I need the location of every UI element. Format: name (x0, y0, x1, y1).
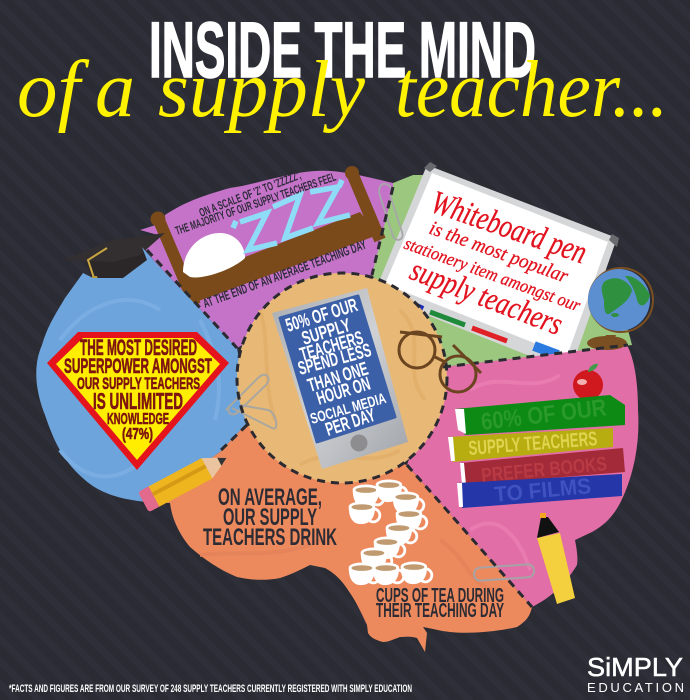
text: books vs films (468, 394, 608, 507)
text: whiteboard pen: stationery item amongst our (402, 233, 584, 316)
text: social media: TEACHERS (298, 328, 366, 366)
text: sleep scale intro: ON A SCALE OF 'Z' TO 'ZZZZZ', (197, 168, 303, 220)
subtitle (17, 46, 668, 134)
icon: left paperclips (226, 375, 276, 429)
icon: number two made of tea cups (349, 480, 432, 585)
logo: SiMPLY (587, 652, 683, 682)
subtitle: supply (158, 46, 365, 134)
text: superpower: (47%) (122, 426, 153, 443)
text: on average: TEACHERS DRINK (203, 524, 337, 551)
brain illustration (36, 162, 653, 652)
text: books vs films: 60% OF OUR (480, 394, 608, 436)
text: whiteboard pen: supply teachers (405, 251, 568, 342)
text: social media: HOUR ON (314, 374, 373, 410)
panel: tea lobe (147, 420, 532, 652)
icon: book stack (448, 394, 625, 508)
text: social media: 50% OF OUR (283, 295, 360, 337)
panel: superpower lobe (36, 247, 250, 502)
text: superpower (64, 335, 212, 443)
icon: highlighter (537, 513, 575, 604)
text: sleep scale intro (173, 168, 338, 238)
text: superpower: KNOWLEDGE (107, 411, 169, 428)
text: social media: THAN ONE (305, 359, 371, 397)
icon: zzz (233, 180, 350, 250)
panel: books lobe (407, 345, 638, 607)
icon: bed (150, 166, 380, 305)
text: cups of tea (376, 585, 504, 622)
subtitle: a (95, 46, 135, 134)
text: sleep scale ending: AT THE END OF AN AVERAGE TEACHING DAY (201, 237, 368, 311)
panel: green whiteboard lobe (372, 175, 632, 367)
text: superpower: IS UNLIMITED (93, 388, 183, 414)
text: books vs films: PREFER BOOKS (480, 453, 608, 487)
text: social media: PER DAY (323, 405, 378, 441)
text: superpower: THE MOST DESIRED (80, 335, 197, 360)
logo (587, 652, 684, 695)
text: whiteboard pen (402, 185, 591, 342)
dashed lobe dividers (147, 187, 628, 607)
icon: graduation cap (63, 233, 165, 300)
text: social media: SPEND LESS (296, 340, 374, 380)
subtitle: of (17, 46, 90, 134)
text: on average (203, 484, 337, 551)
text: cups of tea: THEIR TEACHING DAY (376, 600, 504, 622)
text: superpower: OUR SUPPLY TEACHERS (77, 374, 200, 393)
text: sleep scale intro: THE MAJORITY OF OUR SUPPLY TEACHERS FEEL (173, 170, 338, 238)
logo: EDUCATION (587, 680, 684, 695)
text: on average: ON AVERAGE, (218, 484, 322, 511)
panel: sleep lobe (140, 166, 393, 348)
text: books vs films: TO FILMS (493, 473, 592, 507)
icon: marker pens (410, 303, 558, 355)
text: whiteboard pen: is the most popular (426, 217, 571, 288)
text: social media (283, 295, 388, 441)
icon: paperclip on whiteboard (379, 184, 403, 240)
text: cups of tea: CUPS OF TEA DURING (376, 585, 504, 607)
panel: whiteboard (374, 162, 619, 372)
icon: smartphone (272, 288, 408, 469)
icon: apple (573, 364, 603, 400)
icon: glasses (399, 332, 481, 392)
footnote: *FACTS AND FIGURES ARE FROM OUR SURVEY OF 248 SUPPLY TEACHERS CURRENTLY REGISTERED WITH SIMPLY EDUCATION (9, 683, 412, 695)
text: whiteboard pen: Whiteboard pen (426, 185, 591, 271)
icon: superhero shield (47, 332, 229, 470)
text: on average: OUR SUPPLY (223, 504, 317, 531)
icon: paperclip bottom (474, 564, 534, 581)
text: social media: SUPPLY (299, 315, 353, 350)
text: superpower: SUPERPOWER AMONGST (64, 355, 212, 378)
text: social media: SOCIAL MEDIA (308, 390, 388, 428)
icon: pencil (138, 448, 232, 512)
panel: phone circle (237, 273, 447, 483)
icon: globe (587, 268, 653, 350)
subtitle: teacher... (395, 46, 668, 134)
text: books vs films: SUPPLY TEACHERS (468, 428, 598, 460)
